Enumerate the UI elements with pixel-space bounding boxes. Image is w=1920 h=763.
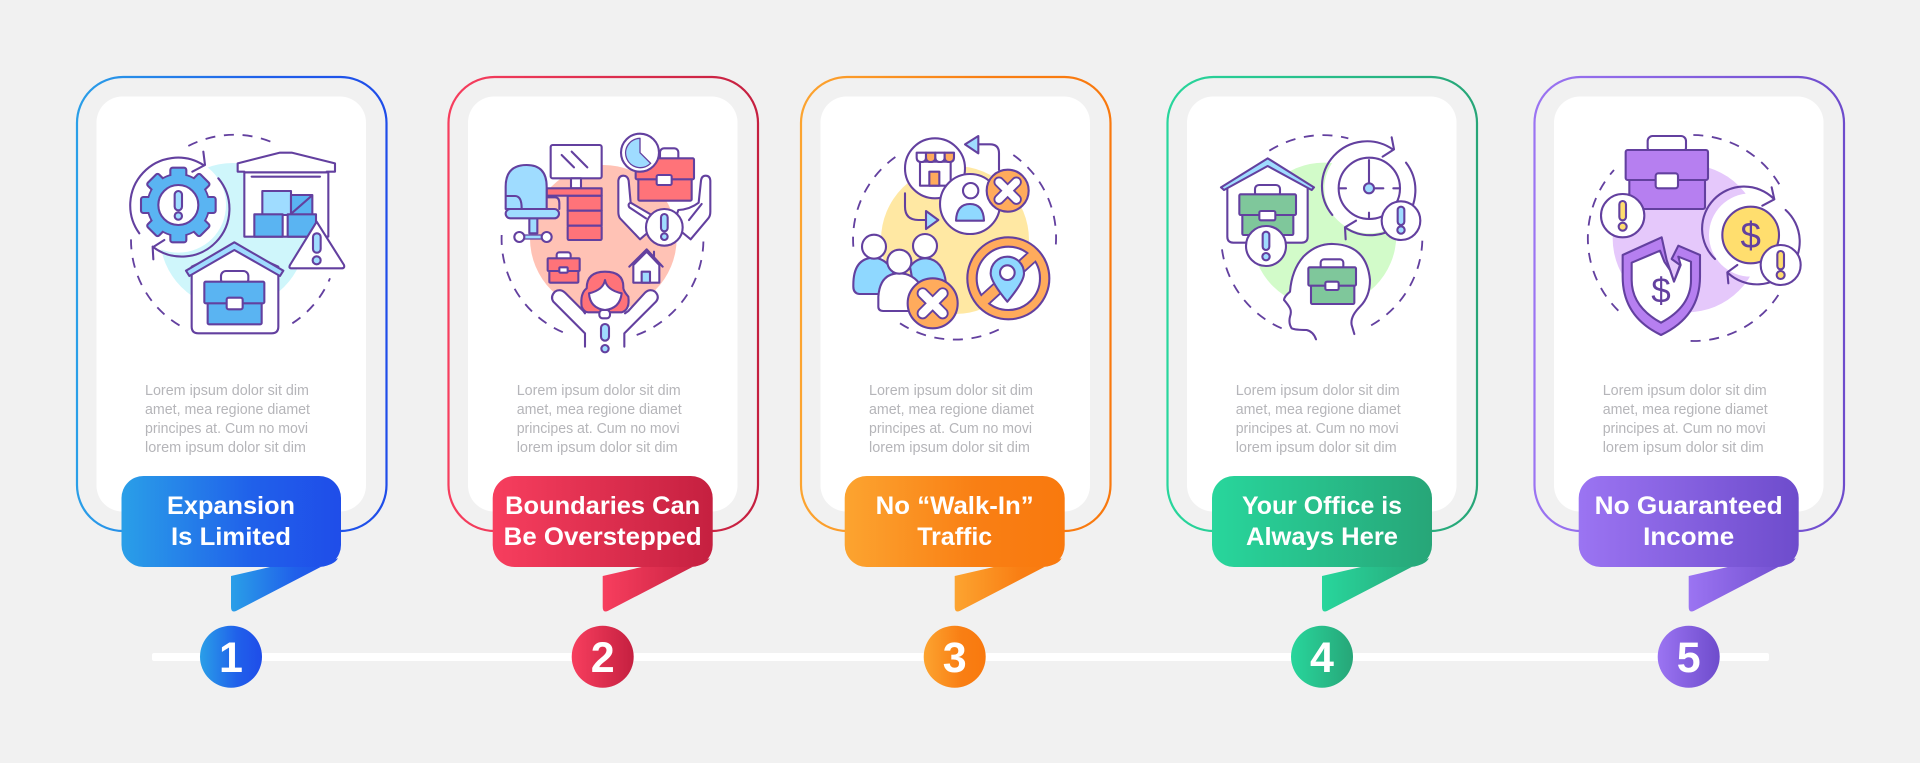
icon: briefcase, broken shield and coin (1588, 135, 1801, 341)
callout: title (845, 476, 1065, 612)
body text: lorem ipsum dolor sit dim (1603, 439, 1764, 456)
step number 2 (572, 626, 634, 688)
panel: No Walk-In Traffic (801, 77, 1110, 688)
body text: amet, mea regione diamet (869, 401, 1035, 418)
callout: title: No “Walk-In” (876, 492, 1034, 520)
icon: gear, warehouse and home office (130, 135, 344, 333)
panel: Your Office is Always Here (1168, 77, 1477, 688)
body text (517, 382, 682, 456)
body text: Lorem ipsum dolor sit dim (517, 382, 681, 399)
panel: Expansion Is Limited (77, 77, 386, 688)
body text: principes at. Cum no movi (1236, 420, 1399, 437)
body text: amet, mea regione diamet (145, 401, 311, 418)
icon: briefcase, broken shield and coin: $ (1651, 272, 1671, 311)
body text: amet, mea regione diamet (1236, 401, 1401, 418)
icon: briefcase, broken shield and coin: $ (1740, 215, 1761, 256)
card frame (801, 77, 1110, 531)
step number 5: 5 (1677, 634, 1701, 682)
icon: house, clock and head with briefcase (1221, 135, 1422, 339)
body text: amet, mea regione diamet (517, 401, 682, 418)
callout: title (493, 476, 713, 612)
body text (145, 382, 311, 456)
body text: Lorem ipsum dolor sit dim (1603, 382, 1767, 399)
body text (1603, 382, 1768, 456)
body text: lorem ipsum dolor sit dim (517, 439, 678, 456)
body text: lorem ipsum dolor sit dim (869, 439, 1030, 456)
card frame (448, 77, 758, 531)
callout: title: Boundaries Can (505, 492, 700, 520)
step number 5 (1658, 626, 1720, 688)
callout: title: Expansion (167, 492, 295, 520)
card frame (77, 77, 386, 531)
callout: title: Always Here (1246, 523, 1398, 551)
body text (869, 382, 1035, 456)
body text: Lorem ipsum dolor sit dim (1236, 382, 1400, 399)
body text: amet, mea regione diamet (1603, 401, 1768, 418)
callout: title: Your Office is (1242, 492, 1402, 520)
body text: lorem ipsum dolor sit dim (145, 439, 306, 456)
callout: title (122, 476, 341, 612)
step number 1 (200, 626, 262, 688)
timeline line (152, 653, 1769, 661)
body text: lorem ipsum dolor sit dim (1236, 439, 1397, 456)
callout: title (1212, 476, 1432, 612)
callout: title: Traffic (917, 523, 992, 551)
card frame (1534, 77, 1844, 531)
step number 4 (1291, 626, 1353, 688)
callout: title (1579, 476, 1799, 612)
step number 3 (924, 626, 986, 688)
step number 3: 3 (943, 634, 967, 682)
callout: title: Income (1643, 523, 1734, 551)
body text: principes at. Cum no movi (869, 420, 1032, 437)
callout: title: No Guaranteed (1595, 492, 1783, 520)
body text: principes at. Cum no movi (517, 420, 680, 437)
body text (1236, 382, 1401, 456)
body text: Lorem ipsum dolor sit dim (145, 382, 309, 399)
body text: Lorem ipsum dolor sit dim (869, 382, 1033, 399)
panel: No Guaranteed Income (1534, 77, 1844, 688)
panel: Boundaries Can Be Overstepped (448, 77, 758, 688)
icon: desk, hands and person (502, 134, 710, 352)
step number 4: 4 (1310, 634, 1334, 682)
body text: principes at. Cum no movi (145, 420, 308, 437)
card frame (1168, 77, 1477, 531)
step number 2: 2 (591, 634, 615, 682)
body text: principes at. Cum no movi (1603, 420, 1766, 437)
step number 1: 1 (219, 634, 243, 682)
callout: title: Be Overstepped (504, 523, 702, 551)
icon: store, customers and crossed pin (853, 136, 1056, 340)
callout: title: Is Limited (171, 523, 291, 551)
